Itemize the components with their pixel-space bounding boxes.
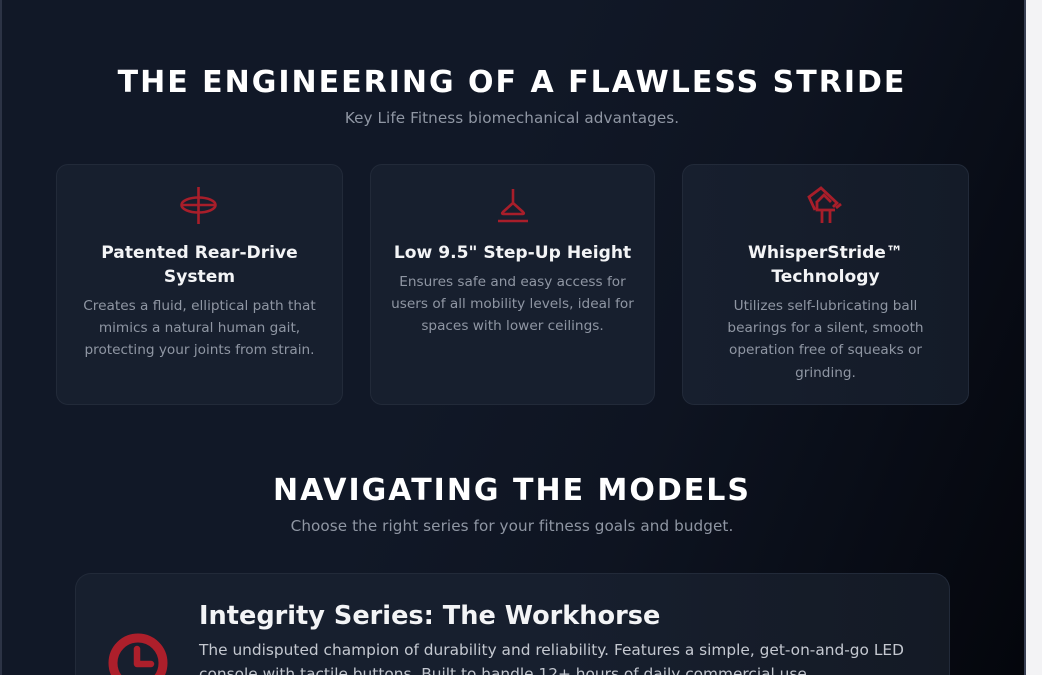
description: integrity series — [198, 641, 904, 675]
description: whisperstride — [727, 298, 924, 381]
panel: rear-drive — [56, 164, 343, 405]
description: rear-drive: protecting your joints from strain. — [84, 342, 314, 358]
description: step-up — [391, 274, 634, 334]
panel: whisperstride — [682, 164, 969, 405]
title: whisperstride — [748, 243, 903, 287]
title: step-up: Low 9.5" Step-Up Height — [394, 243, 631, 263]
title: rear-drive: System — [164, 267, 235, 287]
title: rear-drive: Patented Rear-Drive — [101, 243, 298, 263]
icon: step-up height — [498, 189, 528, 222]
title: whisperstride: WhisperStride™ — [748, 243, 903, 263]
description: step-up: spaces with lower ceilings. — [421, 318, 604, 334]
description: step-up: Ensures safe and easy access for — [399, 274, 626, 290]
subheading: engineering: Key Life Fitness biomechanical advantages. — [345, 109, 679, 127]
description: whisperstride: operation free of squeaks or — [729, 342, 922, 358]
heading: models: NAVIGATING THE MODELS — [273, 473, 751, 508]
description: whisperstride: bearings for a silent, smooth — [727, 320, 924, 336]
title: whisperstride: Technology — [771, 267, 880, 287]
title: rear-drive — [101, 243, 298, 287]
description: integrity series: The undisputed champion of durability and reliability. Features a simple, get-on-and-go LED — [199, 641, 904, 659]
description: whisperstride: grinding. — [795, 365, 856, 381]
description: step-up: users of all mobility levels, ideal for — [391, 296, 634, 312]
description: rear-drive: mimics a natural human gait, — [99, 320, 300, 336]
icon: clock — [108, 634, 168, 675]
panel: step-up — [370, 164, 655, 405]
description: rear-drive — [83, 298, 316, 358]
description: rear-drive: Creates a fluid, elliptical path that — [83, 298, 316, 314]
title: integrity series: Integrity Series: The Workhorse — [199, 601, 660, 631]
icon: rear-drive ellipse — [180, 187, 217, 224]
icon: whisperstride house — [807, 186, 842, 223]
panel: integrity series — [75, 573, 950, 675]
subheading: models: Choose the right series for your fitness goals and budget. — [291, 517, 733, 535]
heading: engineering: THE ENGINEERING OF A FLAWLESS STRIDE — [118, 65, 906, 100]
description: whisperstride: Utilizes self-lubricating ball — [734, 298, 917, 314]
